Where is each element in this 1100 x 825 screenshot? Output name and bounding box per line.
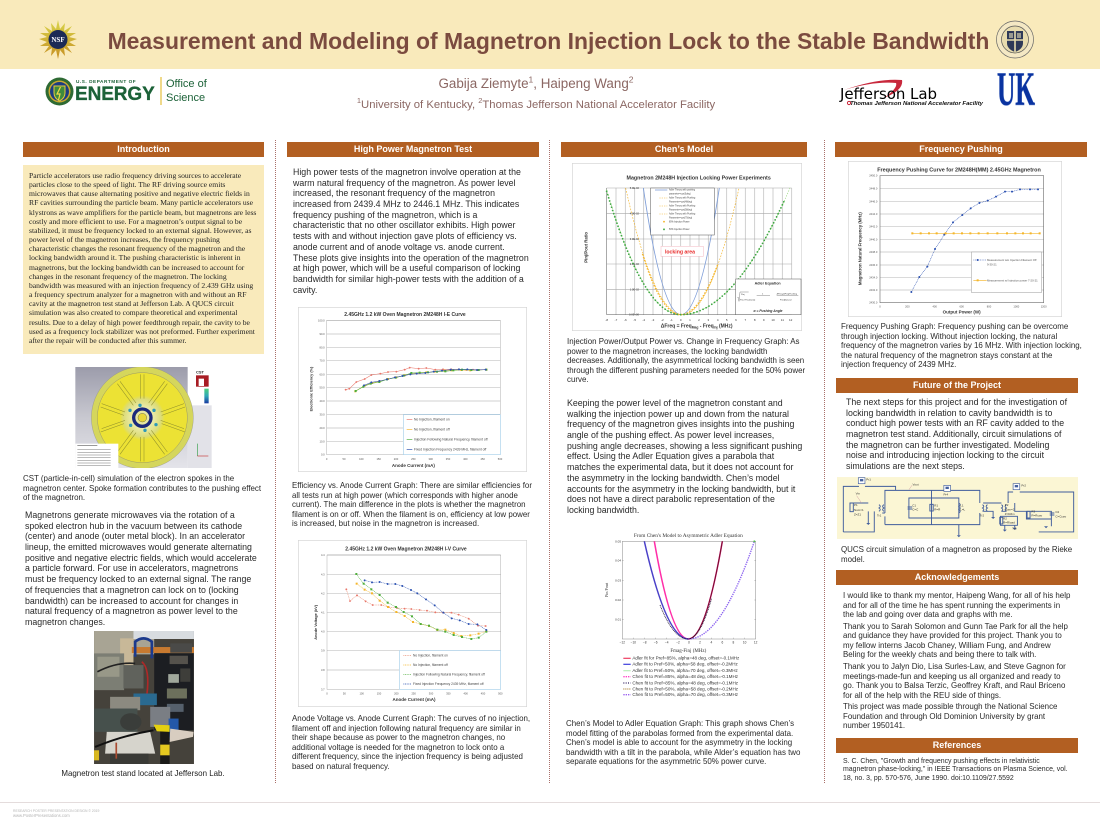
chart: injection locking power experiments: 4: [717, 318, 719, 322]
diagram: QUCS circuit: Vin: [856, 492, 860, 496]
chart: efficiency vs anode current: 50.0: [319, 386, 325, 390]
chart: Chen's model to asymmetric Adler: 0.02: [615, 598, 621, 602]
diagram: QUCS circuit: P2: [1005, 503, 1009, 507]
chart: Chen's model to asymmetric Adler: −10: [631, 641, 636, 645]
diagram: QUCS circuit: Pr1: [866, 478, 871, 482]
diagram: QUCS circuit: Z=Z1: [854, 513, 861, 517]
chart: injection locking power experiments: (MHz): [718, 324, 733, 330]
diagram: QUCS circuit: Num=1: [854, 508, 864, 512]
header band: [0, 0, 1100, 69]
chart: injection locking power experiments: 10: [771, 318, 775, 322]
chart: anode voltage vs anode current: 400: [463, 691, 468, 695]
chart: injection locking power experiments: Pinj/Pout Ratio: [583, 232, 588, 263]
chart: efficiency vs anode current: No Injection, filament off: [414, 427, 450, 431]
text: acknowledgements: This project was made possible through the National Science Foundation and through Old Dominion University by grant number 1950141.: [843, 702, 1057, 730]
chart: injection locking power experiments: -7: [615, 318, 618, 322]
chart: Chen's model to asymmetric Adler: Chen fit to Pref=85%, alpha=48 deg, offset=-0.1MHz: [632, 680, 739, 685]
chart: frequency pushing curve: Magnetron Natural Frequency (MHz): [858, 212, 863, 285]
diagram: QUCS circuit: R=Rload: [1003, 520, 1015, 524]
chart: frequency pushing curve: 0: [879, 305, 881, 309]
heading: Introduction: Introduction: [117, 144, 170, 154]
chart: efficiency vs anode current: 150: [376, 457, 381, 461]
authors: Gabija Ziemyte1, Haipeng Wang2: [438, 75, 634, 91]
chart: injection locking power experiments: 85% Injection Power: [669, 220, 690, 223]
diagram: QUCS circuit: C=Ccav: [1055, 514, 1067, 518]
text: Adler and Chen explanation: Keeping the power level of the magnetron constant and walking the injection power up and down from the natural frequency of the magnetron gives insights into the pushing angle of the pushing effect. As power level increases, pushing angle decreases, showing a less significant pushing effect. Using the Adler Equation gives a parabola that matches the experimental data, but it does not account for the asymmetry in the locking bandwidth. Chen’s model accounts for the asymmetry in the locking bandwidth, but it does not have a direct parabolic representation of the locking bandwidth.: [567, 398, 802, 515]
footer credit: RESEARCH POSTER PRESENTATION DESIGN © 2019: [13, 809, 99, 813]
chart: Chen's model to asymmetric Adler: Fmag-Finj (MHz): [670, 649, 707, 654]
diagram: QUCS circuit: Vout: [913, 483, 919, 487]
chart: injection locking power experiments: 4.0E-02: [630, 212, 640, 216]
logo: DOE Office of Science: U.S. DEPARTMENT OF: [76, 79, 136, 84]
chart: anode voltage vs anode current: 500: [498, 691, 503, 695]
chart: frequency pushing curve: 800: [987, 305, 992, 309]
chart: injection locking power experiments: Adler Theory with Pushing: [669, 213, 696, 216]
chart: Chen's model to asymmetric Adler: From Chen's Model to Asymmetric Adler Equation: [634, 533, 743, 539]
chart: frequency pushing curve: Output Power (W): [943, 310, 981, 315]
chart: frequency pushing curve: 200: [905, 305, 910, 309]
caption: Chen's model graph: Chen’s Model to Adler Equation Graph: This graph shows Chen’s model fitting of the parabolas formed from the experimental data. Chen’s model is able to account for the asymmetry in the locking bandwidth with a tilt in the parabola, while Alder’s equation has two separate equations for the asymmetric 50% power curve.: [566, 719, 800, 766]
panel: introduction text: Particle accelerators use radio frequency driving sources to accelerate particles close to the speed of light. The RF driving source emits microwaves that cause alternating positive and negative electric fields in RF cavities surrounding the particle beam. Many particle accelerators use klystrons as wave amplifiers for the particle beam, but magnetrons are less costly and more efficient to use. For a magnetron’s output signal to be stabilized, it must be frequency locked to an external signal. However, as power level of the magnetron increases, the frequency pushing characteristic changes the resonant frequency of the magnetron and the locking bandwidth around it. The pushing characteristic is inherent in magnetrons, but the locking bandwidth can be increased to account for changes in the resonant frequency of the magnetron. The locking bandwidth was measured with an injection frequency of 2.439 GHz using a frequency spectrum analyzer for a magnetron with and without an RF cavity at the magnetron test stand at Jefferson Lab. A QUCS circuit simulation was also created to compare theoretical and experimental results. Due to a delay of high power feedthrough repair, the cavity to be used as a frequency lock stabilizer was not preformed. Further experiment after the repair will be conducted after this summer.: [29, 171, 256, 345]
chart: efficiency vs anode current: 450: [480, 457, 485, 461]
diagram: QUCS circuit: R1: [934, 503, 938, 507]
chart: efficiency vs anode current: 0: [326, 457, 328, 461]
chart: efficiency vs anode current: 70.0: [319, 359, 325, 363]
diagram: QUCS circuit: Num=2: [1005, 507, 1015, 511]
chart: efficiency vs anode current: 80.0: [319, 345, 325, 349]
text: references: S. C. Chen, "Growth and frequency pushing effects in relativistic magnetron phase-locking," in IEEE Transactions on Plasma Science, vol. 18, no. 3, pp. 570-576, June 1990. doi:10.1109/27.5592: [843, 758, 1068, 782]
chart: Chen's model to asymmetric Adler: −6: [654, 641, 658, 645]
chart: injection locking power experiments: Parameter=cos(58deg): [669, 209, 692, 212]
Adler equation box: 1: [762, 294, 764, 296]
chart: frequency pushing curve: 2448.0: [869, 187, 878, 191]
chart: anode voltage vs anode current: Anode Voltage (kV): [314, 604, 318, 640]
chart: Chen's model to asymmetric Adler: [604, 533, 758, 697]
chart: efficiency vs anode current: 500: [498, 457, 503, 461]
text: acknowledgements: Thank you to Sarah Solomon and Gunn Tae Park for all the help and guidance they have provided for this project. Thank you to my fellow interns Jacob Chaney, William Fung, and Andrew Beling for the weekly chats and being there to talk with.: [843, 622, 1068, 659]
chart: injection locking power experiments: 2: [698, 318, 700, 322]
chart: frequency pushing curve: 2430.0: [869, 301, 878, 305]
logo: DOE Office of Science: ENERGY: [75, 84, 155, 105]
chart: injection locking power experiments: 1: [689, 318, 691, 322]
logo: DOE Office of Science: [46, 77, 207, 106]
chart: frequency pushing curve: Measurement w/ Injection power 7-20-21: [987, 278, 1038, 282]
diagram: QUCS circuit: C1: [912, 503, 916, 507]
logo: Jefferson Lab: [839, 80, 984, 107]
chart: frequency pushing curve: 2434.0: [869, 276, 878, 280]
diagram: QUCS circuit: C=C: [912, 508, 919, 512]
Adler equation box: FreqNatural: [780, 298, 792, 301]
chart: Chen's model to asymmetric Adler: 0.03: [615, 578, 621, 582]
caption: CST simulation: CST (particle-in-cell) simulation of the electron spokes in the magnetron center. Spoke formation contributes to the pushing effect of the magnetron.: [23, 474, 261, 502]
caption: efficiency graph: Efficiency vs. Anode Current Graph: There are similar efficiencies for all tests run at high power (which corresponds with higher anode current). The main difference in the plots is whether the magnetron filament is on or off. When the filament is on, efficiency at low power is increased, but noise in the magnetron is increased.: [292, 481, 532, 528]
chart: Chen's model to asymmetric Adler: −8: [643, 641, 647, 645]
image: CST simulation of magnetron: CST: [196, 369, 205, 374]
chart: efficiency vs anode current: 40.0: [319, 399, 325, 403]
icon: NSF logo: [39, 20, 77, 59]
chart: Chen's model to asymmetric Adler: 12: [754, 641, 758, 645]
chart: anode voltage vs anode current: Anode Current (mA): [393, 697, 436, 702]
chart: anode voltage vs anode current: [298, 540, 527, 707]
caption: QUCS circuit: QUCS circuit simulation of a magnetron as proposed by the Rieke model.: [841, 545, 1072, 564]
Adler equation box: Adler Equation: [755, 282, 781, 286]
Adler equation box: [736, 279, 801, 315]
diagram: QUCS circuit: R2: [1003, 516, 1007, 520]
heading: Frequency Pushing: Frequency Pushing: [919, 144, 1003, 154]
text: future of the project: The next steps for this project and for the investigation of locking bandwidth in relation to cavity bandwidth is to conduct high power tests with an RF cavity added to the magnetron test stand. Additionally, circuit simulations of the magnetron can be further investigated. Modeling noise and introducing injection locking to the circuit simulations are the next steps.: [846, 397, 1067, 471]
chart: anode voltage vs anode current: 3.7: [321, 687, 325, 691]
chart: Chen's model to asymmetric Adler: 0: [688, 641, 690, 645]
affiliations: 1University of Kentucky, 2Thomas Jefferson National Accelerator Facility: [357, 96, 715, 111]
chart: anode voltage vs anode current: 4.3: [321, 572, 325, 576]
chart: efficiency vs anode current: 90.0: [319, 332, 325, 336]
chart: anode voltage vs anode current: 200: [394, 691, 399, 695]
chart: injection locking power experiments: 11: [781, 318, 784, 322]
chart: frequency pushing curve: 400: [932, 305, 937, 309]
chart: anode voltage vs anode current: 150: [377, 691, 382, 695]
heading: Chen's Model: Chen’s Model: [655, 144, 713, 154]
chart: anode voltage vs anode current: 350: [446, 691, 451, 695]
chart: injection locking power experiments: [572, 163, 802, 331]
heading: Future of the Project: [836, 378, 1078, 393]
chart: injection locking power experiments: 0.0E+00: [629, 313, 640, 317]
icon: NSF logo: NSF: [51, 36, 65, 44]
image: CST simulation of magnetron: [75, 367, 212, 468]
chart: frequency pushing curve: 2444.0: [869, 212, 878, 216]
caption: anode voltage graph: Anode Voltage vs. Anode Current Graph: The curves of no injection, filament off and injection following natural frequency are similar in their shape because as power to the magnetron changes, no additional voltage is needed for the magnetron to lock onto a different frequency, since the injection frequency is being adjusted based on natural frequency.: [292, 714, 530, 771]
chart: injection locking power experiments: 1.0E-02: [630, 288, 640, 292]
chart: injection locking power experiments: 9: [763, 318, 765, 322]
title: Measurement and Modeling of Magnetron Injection Lock to the Stable Bandwidth: [108, 28, 989, 54]
chart: injection locking power experiments: 5: [726, 318, 728, 322]
chart: efficiency vs anode current: 2.45GHz 1.2 kW Oven Magnetron 2M248H I-E Curve: [344, 312, 466, 318]
chart: frequency pushing curve: 1000: [1013, 305, 1020, 309]
diagram: QUCS circuit: L=L: [960, 508, 966, 512]
chart: Chen's model to asymmetric Adler: Adler fit to Pref=50%, alpha=70 deg, offset=-0.3MHz: [632, 668, 739, 673]
chart: Chen's model to asymmetric Adler: Chen fit to Pref=85%, alpha=48 deg, offset=-0.1MHz: [632, 674, 739, 679]
chart: anode voltage vs anode current: 3.9: [321, 649, 325, 653]
chart: injection locking power experiments: 0: [680, 318, 682, 322]
chart: injection locking power experiments: parameter=cos(0deg): [669, 192, 691, 195]
chart: efficiency vs anode current: 30.0: [319, 412, 325, 416]
Adler equation box: Pinj: [741, 294, 745, 296]
chart: injection locking power experiments: Inj: [714, 325, 718, 329]
Adler equation box: α = Pushing Angle: [753, 309, 783, 313]
Adler equation box: ΔFreq-ΔFreqPushing: [777, 293, 798, 296]
chart: efficiency vs anode current: 350: [446, 457, 451, 461]
chart: injection locking power experiments: 7: [744, 318, 746, 322]
chart: injection locking power experiments: -4: [642, 318, 645, 322]
chart: injection locking power experiments: 6: [735, 318, 737, 322]
image: magnetron test stand photo: [94, 631, 194, 764]
footer credit: [13, 809, 100, 818]
chart: Chen's model to asymmetric Adler: 8: [732, 641, 734, 645]
chart: efficiency vs anode current: 10.0: [319, 439, 325, 443]
logo: Jefferson Lab: Jefferson Lab: [839, 85, 937, 103]
heading: Introduction: [23, 142, 264, 157]
heading: References: References: [933, 740, 981, 750]
locking area label: [661, 246, 703, 256]
chart: frequency pushing curve: 9-30-21: [987, 262, 997, 266]
chart: injection locking power experiments: 2.0E-02: [630, 262, 640, 266]
column dividers: [275, 140, 276, 783]
chart: Chen's model to asymmetric Adler: −4: [665, 641, 669, 645]
footer rule: [0, 802, 1100, 803]
text: acknowledgements: [843, 591, 1070, 730]
diagram: QUCS circuit: Tr3: [1012, 527, 1017, 531]
caption: injection power graph: Injection Power/Output Power vs. Change in Frequency Graph: As power to the magnetron increases, the locking bandwidth decreases. Additionally, the asymmetrical locking bandwidth is seen through the different pushing parameters needed for the 50% power curve.: [567, 337, 805, 384]
chart: Chen's model to asymmetric Adler: 10: [743, 641, 747, 645]
logo: DOE Office of Science: Office of Science: [166, 78, 207, 104]
chart: injection locking power experiments: -6: [624, 318, 627, 322]
chart: injection locking power experiments: 5.0E-02: [630, 186, 640, 190]
chart: anode voltage vs anode current: 0: [326, 691, 328, 695]
chart: injection locking power experiments: Mag: [692, 325, 698, 329]
heading: High Power Magnetron Test: High Power Magnetron Test: [354, 144, 472, 154]
heading: Frequency Pushing: [835, 142, 1087, 157]
caption: test stand: Magnetron test stand located at Jefferson Lab.: [61, 769, 225, 778]
heading: References: [836, 738, 1078, 752]
chart: anode voltage vs anode current: 2.45GHz 1.2 kW Oven Magnetron 2M248H I-V Curve: [345, 547, 467, 553]
chart: Chen's model to asymmetric Adler: Chen fit to Pref=50%, alpha=70 deg, offset=-0.3MHz: [632, 692, 739, 697]
chart: Chen's model to asymmetric Adler: 6: [721, 641, 723, 645]
chart: frequency pushing curve: 2450.0: [869, 174, 878, 178]
chart: injection locking power experiments: ΔFreq = Freq: [661, 324, 692, 330]
chart: injection locking power experiments: -1: [670, 318, 673, 322]
chart: anode voltage vs anode current: 4.2: [321, 591, 325, 595]
chart: frequency pushing curve: [848, 161, 1062, 317]
chart: frequency pushing curve: 600: [959, 305, 964, 309]
chart: injection locking power experiments: Adler Theory with Pushing: [669, 197, 696, 200]
diagram: QUCS circuit: Tr1: [877, 513, 882, 517]
chart: Chen's model to asymmetric Adler: Chen fit to Pref=50%, alpha=58 deg, offset=-0.2MHz: [632, 686, 739, 691]
diagram: QUCS circuit: Tr2: [980, 513, 985, 517]
chart: injection locking power experiments: 8: [754, 318, 756, 322]
chart: efficiency vs anode current: Electronic Efficiency (%): [310, 366, 314, 411]
chart: injection locking power experiments: 12: [789, 318, 793, 322]
chart: efficiency vs anode current: 50: [343, 457, 346, 461]
chart: injection locking power experiments: Adler Theory with pushing: [669, 189, 696, 192]
chart: injection locking power experiments: 3: [707, 318, 709, 322]
chart: frequency pushing curve: 2446.0: [869, 199, 878, 203]
diagram: QUCS circuit: L1: [960, 503, 964, 507]
chart: anode voltage vs anode current: 250: [411, 691, 416, 695]
text: acknowledgements: I would like to thank my mentor, Haipeng Wang, for all of his help and for all of the time he has spent running the experiments in the lab and going over data and graphs with me.: [843, 591, 1070, 619]
Adler equation box: Pout·Pout(ratio): [740, 298, 756, 301]
chart: frequency pushing curve: 2442.0: [869, 225, 878, 229]
chart: anode voltage vs anode current: 450: [481, 691, 486, 695]
chart: frequency pushing curve: 2436.0: [869, 263, 878, 267]
chart: injection locking power experiments: Magnetron 2M248H Injection Locking Power Experiments: [627, 175, 771, 181]
chart: anode voltage vs anode current: 4.0: [321, 629, 325, 633]
chart: efficiency vs anode current: Anode Current (mA): [392, 463, 435, 468]
text: magnetron explanation: Magnetrons generate microwaves via the rotation of a spoked electron hub in the vacuum between its cathode (center) and anode (outer metal block). In an accelerator lineup, the emitted microwaves would generate alternating positive and negative electric fields, which would accelerate a particle forward. For use in accelerators, magnetrons must be frequency locked to an external signal. The range of frequencies that a magnetron can lock on to (locking bandwidth) can be increased to account for changes in natural frequency of a magnetron as power level to the magnetron changes.: [25, 510, 257, 627]
chart: injection locking power experiments: -8: [605, 318, 608, 322]
diagram: QUCS circuit: Z=Rdm: [1005, 512, 1015, 516]
chart: efficiency vs anode current: No Injection, filament on: [414, 417, 450, 421]
chart: efficiency vs anode current: 100: [359, 457, 364, 461]
chart: anode voltage vs anode current: 300: [429, 691, 434, 695]
chart: anode voltage vs anode current: 100: [359, 691, 364, 695]
text: acknowledgements: Thank you to Jalyn Dio, Lisa Surles-Law, and Steve Gagnon for meetings-made-fun and keeping us all organized and ready to go. Thank you to Balsa Terzic, Geoffrey Kraft, and Raul Briceno for all of the help with the REU side of things.: [843, 662, 1066, 700]
chart: anode voltage vs anode current: 4.1: [321, 610, 325, 614]
chart: efficiency vs anode current: 250: [411, 457, 416, 461]
chart: efficiency vs anode current: 20.0: [319, 426, 325, 430]
chart: efficiency vs anode current: Fixed Injection Frequency 2439 MHz, filament off: [414, 447, 486, 451]
icon: Old Dominion University seal: [996, 20, 1034, 58]
chart: Chen's model to asymmetric Adler: −12: [620, 641, 625, 645]
chart: anode voltage vs anode current: 3.8: [321, 668, 325, 672]
chart: efficiency vs anode current: 100.0: [318, 318, 325, 322]
chart: anode voltage vs anode current: No Injection, filament off: [413, 663, 448, 667]
chart: Chen's model to asymmetric Adler: Adler fit to Pref=50%, alpha=58 deg, offset=-0.2MHz: [632, 662, 739, 667]
chart: frequency pushing curve: 2432.0: [869, 288, 878, 292]
chart: injection locking power experiments: 3.0E-02: [630, 237, 640, 241]
chart: efficiency vs anode current: 60.0: [319, 372, 325, 376]
chart: injection locking power experiments: -5: [633, 318, 636, 322]
diagram: QUCS circuit: Pr2: [1021, 484, 1026, 488]
chart: injection locking power experiments: -3: [652, 318, 655, 322]
chart: anode voltage vs anode current: Injection Following Natural Frequency, filament off: [413, 672, 485, 676]
chart: efficiency vs anode current: 300: [428, 457, 433, 461]
chart: injection locking power experiments: Adler Theory with Pushing: [669, 205, 696, 208]
chart: frequency pushing curve: 2440.0: [869, 237, 878, 241]
diagram: QUCS circuit: P1: [854, 503, 858, 507]
caption: frequency pushing graph: Frequency Pushing Graph: Frequency pushing can be overcome through injection locking. Without injection locking, the natural frequency of the magnetron varies by 16 MHz. With injection locking, the natural frequency of the magnetron stays constant at the injection frequency of 2439 MHz.: [841, 322, 1082, 369]
heading: Acknowledgements: [836, 570, 1078, 585]
heading: Future of the Project: Future of the Project: [913, 380, 1001, 390]
chart: efficiency vs anode current: 400: [463, 457, 468, 461]
locking area label: locking area: [665, 249, 695, 255]
chart: frequency pushing curve: 1200: [1041, 305, 1047, 309]
logo: Jefferson Lab: Thomas Jefferson National Accelerator Facility: [850, 101, 984, 107]
chart: efficiency vs anode current: 200: [394, 457, 399, 461]
chart: frequency pushing curve: 2438.0: [869, 250, 878, 254]
chart: Chen's model to asymmetric Adler: 2: [699, 641, 701, 645]
diagram: QUCS circuit: R3: [1031, 509, 1036, 513]
chart: Chen's model to asymmetric Adler: 0.04: [615, 559, 621, 563]
diagram: QUCS circuit: [837, 477, 1078, 539]
chart: Chen's model to asymmetric Adler: Pin/Pout: [604, 582, 609, 597]
chart: Chen's model to asymmetric Adler: 0.05: [615, 539, 621, 543]
chart: injection locking power experiments: 50% Injection Power: [669, 228, 690, 231]
chart: efficiency vs anode current: Injection Following Natural Frequency, filament off: [414, 437, 488, 441]
chart: Chen's model to asymmetric Adler: 4: [710, 641, 712, 645]
heading: Chen's Model: [561, 142, 807, 157]
diagram: QUCS circuit: R=Rcav: [1031, 514, 1043, 518]
chart: injection locking power experiments: -2: [661, 318, 664, 322]
chart: Chen's model to asymmetric Adler: −2: [676, 641, 680, 645]
diagram: QUCS circuit: R=R: [934, 508, 941, 512]
diagram: QUCS circuit: Pr4: [944, 493, 949, 497]
chart: anode voltage vs anode current: 4.4: [321, 553, 325, 557]
heading: Acknowledgements: Acknowledgements: [915, 572, 999, 582]
chart: anode voltage vs anode current: Fixed Injection Frequency 2439 MHz, filament off: [413, 682, 484, 686]
chart: efficiency vs anode current: 0.0: [321, 453, 325, 457]
heading: High Power Magnetron Test: [287, 142, 539, 157]
footer credit: www.PosterPresentations.com: [13, 813, 70, 818]
chart: injection locking power experiments: Parameter=cos(48deg): [669, 201, 692, 204]
diagram: QUCS circuit: C2: [1055, 510, 1060, 514]
chart: anode voltage vs anode current: No Injection, filament on: [413, 654, 448, 658]
chart: Chen's model to asymmetric Adler: 0.01: [615, 617, 621, 621]
chart: Chen's model to asymmetric Adler: Adler fit for Pref=85%, alpha=48 deg, offset=-0.1MHz: [632, 656, 740, 661]
text: high power tests: High power tests of the magnetron involve operation at the warm natural frequency of the magnetron. As power level increased, the resonant frequency of the magnetron increased from 2439.4 MHz to 2446.1 MHz. This indicates frequency pushing of the magnetron, which is a characteristic that no other oscillator exhibits. High power tests with and without injection gave plots of efficiency vs. anode current and of anode voltage vs. anode current. These plots give insights into the operation of the magnetron at high power, which will be a useful comparison of locking bandwidth for similar high-power tests with the addition of a cavity.: [293, 167, 529, 295]
chart: anode voltage vs anode current: 50: [343, 691, 346, 695]
chart: frequency pushing curve: Measurement w/o Injection Filament Off: [987, 258, 1037, 262]
chart: injection locking power experiments: Parameter=cos(70deg): [669, 217, 692, 220]
chart: efficiency vs anode current: [298, 307, 527, 472]
chart: frequency pushing curve: Frequency Pushing Curve for 2M248H(MM) 2.45GHz Magnetron: [877, 167, 1041, 173]
chart: injection locking power experiments: - Freq: [698, 324, 714, 330]
